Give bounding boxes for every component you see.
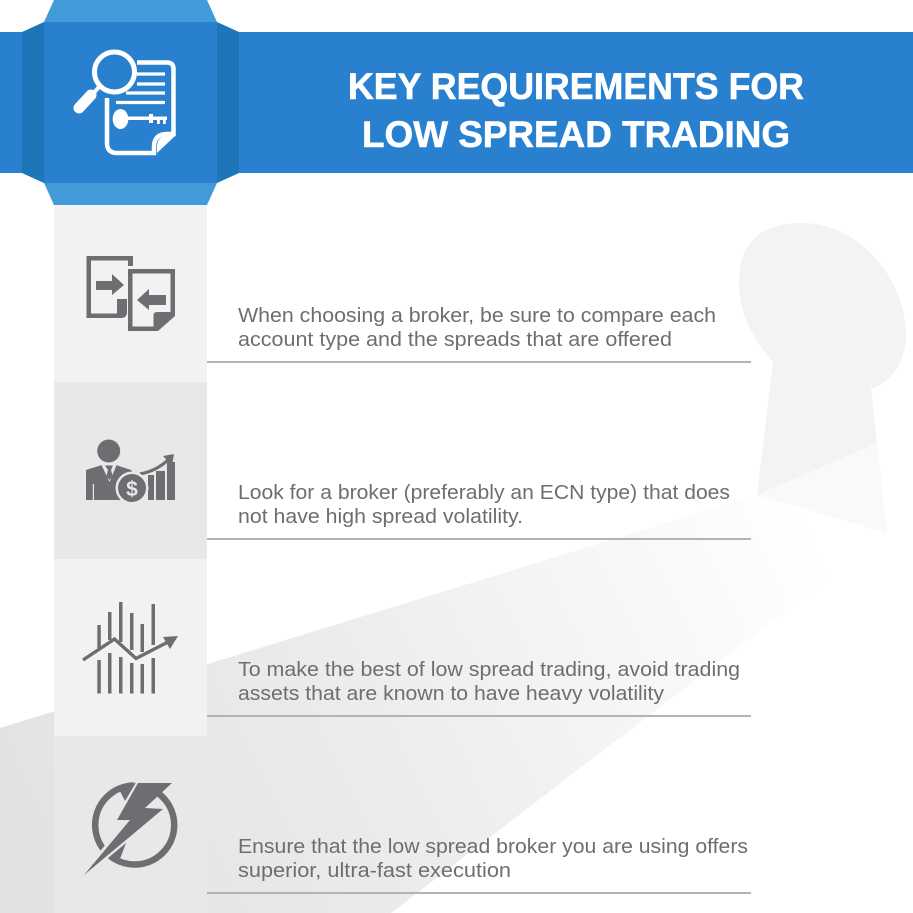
icon: businessman with dollar coin and growth chart: $: [126, 478, 138, 501]
text: fast execution: [238, 835, 748, 882]
background keyhole: [739, 223, 906, 533]
icon: volatile bar chart with arrow: [83, 602, 178, 694]
background light beam: [0, 495, 887, 913]
text: spread volatility: Look for a broker (preferably an ECN type) that does: [238, 481, 730, 504]
title: [348, 66, 804, 155]
icon: magnifier over document with key: [79, 52, 175, 153]
icon: businessman with dollar coin and growth chart: [86, 440, 175, 504]
text: avoid volatile assets: [238, 658, 740, 705]
text: fast execution: superior, ultra-fast execution: [238, 859, 511, 882]
title: KEY REQUIREMENTS FOR: [348, 66, 804, 107]
text: avoid volatile assets: assets that are known to have heavy volatility: [238, 682, 665, 705]
text: avoid volatile assets: To make the best of low spread trading, avoid trading: [238, 658, 740, 681]
icon: document exchange: [86, 256, 175, 331]
title: LOW SPREAD TRADING: [362, 114, 790, 155]
text: spread volatility: not have high spread volatility.: [238, 505, 523, 528]
header banner: [0, 0, 913, 205]
text: fast execution: Ensure that the low spread broker you are using offers: [238, 835, 748, 858]
text: compare account types: When choosing a broker, be sure to compare each: [238, 304, 716, 327]
text: spread volatility: [238, 481, 730, 528]
text: compare account types: [238, 304, 716, 351]
text: compare account types: account type and the spreads that are offered: [238, 328, 672, 351]
icon: lightning bolt in circle: [84, 778, 174, 875]
left icon column: [54, 205, 207, 913]
